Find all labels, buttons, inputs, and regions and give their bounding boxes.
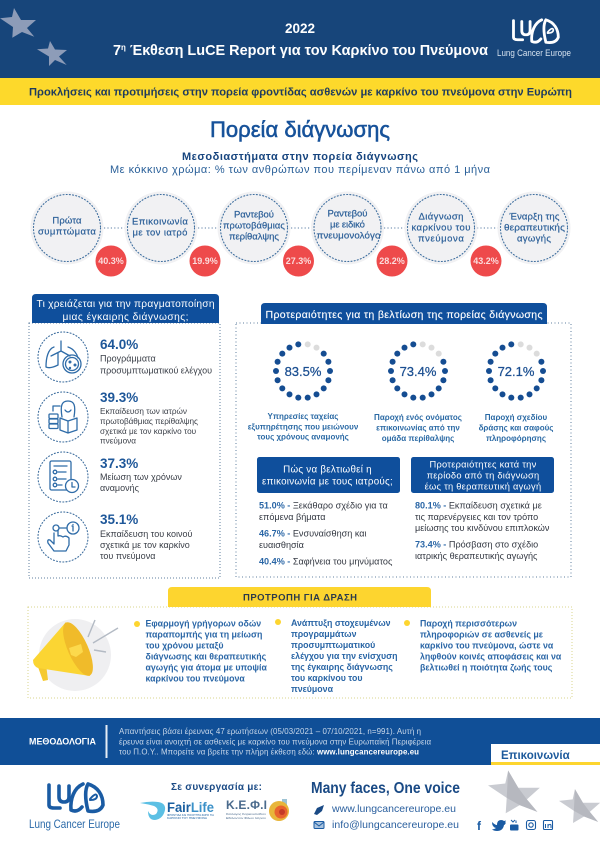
action 3: καρκίνο του πνεύμονα, ώστε να — [420, 640, 554, 650]
step 5: καρκίνου του — [412, 222, 470, 234]
FairLife logo: ΦΡΟΝΤΙΔΑ ΚΑΙ ΠΟΙΟΤΗΤΑ ΖΩΗΣ ΓΙΑ — [167, 814, 214, 817]
donut caption 2 — [374, 413, 462, 443]
action 2 — [275, 618, 398, 694]
stat 64.0: Προγράμματα — [100, 354, 156, 364]
sub heading: priorities until treatment: έως τη θεραπευτική αγωγή — [425, 482, 541, 492]
subheading: Μεσοδιαστήματα στην πορεία διάγνωσης — [182, 151, 418, 163]
icon: doctor reading — [38, 392, 88, 442]
action 2: προγραμμάτων — [291, 629, 357, 639]
list: communication: ευαισθησία — [259, 540, 304, 550]
methodology text: έρευνα είναι ανοιχτή σε ασθενείς με καρκίνο του πνεύμονα στην Ευρωπαϊκή Περιφέρεια — [119, 738, 431, 746]
sub heading: doctors communication: επικοινωνία με τους ιατρούς; — [262, 476, 393, 488]
sub heading: priorities until treatment: Προτεραιότητες κατά την — [430, 460, 537, 470]
stat 39.3: πρωτοβάθμιας περίθαλψης — [100, 417, 198, 426]
panel frame — [236, 323, 571, 577]
tab: communication — [491, 744, 600, 765]
KEFI logo: Σύλλογος Καρκινοπαθών — [226, 812, 267, 816]
action 3 — [404, 618, 562, 672]
stat 64.0: 64.0% — [100, 337, 138, 352]
action 3: πληροφοριών σε ασθενείς με — [420, 630, 544, 640]
FairLife logo: ΚΑΡΚΙΝΟ ΤΟΥ ΠΝΕΥΜΟΝΑ — [167, 817, 207, 820]
action 1 — [134, 618, 267, 684]
donut caption 2: Παροχή ενός ονόματος — [374, 413, 462, 422]
step 2 — [124, 192, 198, 264]
slogan: Many faces, One voice — [311, 780, 460, 797]
methodology text — [119, 727, 431, 756]
list: treatment priorities — [415, 500, 550, 561]
icon: facebook: f — [477, 819, 482, 833]
list: communication — [259, 500, 393, 566]
KEFI logo: Εθελοντών Φίλων Ιατρών — [226, 816, 267, 820]
step 2: με τον ιατρό — [132, 228, 188, 238]
action 1: αγωγής για άτομα με υποψία — [146, 662, 267, 672]
donut caption 1: Υπηρεσίες ταχείας — [268, 412, 338, 421]
list: treatment priorities: 80.1% - Εκπαίδευση σχετικά με — [415, 500, 542, 510]
action 2: πνεύμονα — [291, 684, 334, 694]
donut caption 3: πληροφόρησης — [486, 434, 546, 443]
step 5: Διάγνωση — [418, 212, 464, 222]
step 6 — [498, 192, 570, 264]
methodology band — [0, 718, 600, 765]
badge 19.9: 19.9% — [192, 256, 218, 266]
step 4: πνευμονολόγο — [316, 230, 380, 242]
KEFI logo: Κ.Ε.Φ.Ι — [226, 798, 267, 812]
donut caption 2: επικοινωνίας από την — [376, 424, 460, 432]
donut caption 1: εξυπηρέτησης που μειώνουν — [248, 422, 359, 432]
timeline connectors — [104, 227, 498, 229]
list: treatment priorities: 73.4% - Πρόσβαση στο σχέδιο — [415, 540, 538, 550]
footer star small — [559, 789, 600, 823]
donut caption 3: δράσης και σαφούς — [479, 424, 553, 432]
action 2: του καρκίνου του — [291, 673, 362, 683]
panel heading — [261, 303, 547, 324]
list: communication: 40.4% - Σαφήνεια του μηνύματος — [259, 556, 393, 566]
stat 35.1: σχετικά με τον καρκίνο — [100, 540, 190, 550]
step 6: Έναρξη της — [508, 212, 560, 222]
step 5 — [404, 192, 478, 264]
action 1: του χρόνου μεταξύ — [146, 640, 224, 650]
legend line: Με κόκκινο χρώμα: % των ανθρώπων που περίμεναν πάνω από 1 μήνα — [110, 164, 491, 176]
stat 64.0: προσυμπτωματικού ελέγχου — [100, 366, 212, 376]
stat 37.3: αναμονής — [100, 483, 140, 493]
year: 2022 — [285, 21, 315, 36]
timeline steps — [30, 192, 570, 264]
stat 37.3 — [100, 456, 182, 493]
stat 39.3 — [100, 390, 198, 446]
main heading: Πορεία διάγνωσης — [210, 117, 390, 142]
stat 64.0 — [100, 337, 212, 376]
footer logo: Lung Cancer Europe — [29, 817, 120, 831]
report title: Έκθεση LuCE Report για τον Καρκίνο του Πνεύμονα — [126, 43, 488, 59]
donut 83.5: 83.5% — [285, 364, 322, 379]
panel heading: ΠΡΟΤΡΟΠΗ ΓΙΑ ΔΡΑΣΗ — [243, 592, 357, 604]
KEFI logo — [226, 798, 289, 821]
panel heading: μιας έγκαιρης διάγνωσης; — [62, 311, 188, 323]
list: communication: 51.0% - Ξεκάθαρο σχέδιο για τα — [259, 500, 388, 510]
stat 35.1 — [100, 512, 193, 561]
icon: youtube — [510, 820, 518, 830]
donut 73.4: 73.4% — [400, 364, 437, 379]
panel: timely diagnosis needs — [29, 294, 220, 578]
panel frame — [29, 323, 220, 578]
stat 39.3: Εκπαίδευση των ιατρών — [100, 407, 187, 416]
badge 43.2: 43.2% — [473, 256, 499, 266]
FairLife logo: FairLife — [167, 799, 214, 815]
action 1: καρκίνου του πνεύμονα — [146, 674, 245, 684]
methodology label: ΜΕΘΟΔΟΛΟΓΙΑ — [29, 736, 96, 746]
action 3: Παροχή περισσότερων — [420, 618, 517, 628]
icon: megaphone — [33, 618, 118, 691]
action 3: βελτιωθεί η ποιότητα ζωής τους — [420, 662, 553, 672]
list: treatment priorities: μείωσης του κινδύνου επιπλοκών — [415, 523, 550, 533]
sub heading: doctors communication — [257, 457, 400, 493]
donut caption 3 — [479, 413, 553, 443]
header band — [0, 0, 600, 78]
stat 39.3: πνεύμονα — [100, 436, 136, 446]
LuCE logo white — [513, 20, 558, 43]
badge 27.3 — [283, 246, 314, 276]
step 1: Πρώτα — [52, 216, 82, 226]
red percentage badges — [96, 246, 502, 276]
stat 39.3: σχετικά με τον καρκίνο του — [100, 427, 197, 436]
icon: linkedin — [544, 820, 552, 830]
stat 35.1: Εκπαίδευση του κοινού — [100, 529, 193, 539]
sub heading: doctors communication: Πώς να βελτιωθεί η — [283, 464, 372, 476]
FairLife logo — [140, 799, 214, 820]
panel heading: Τι χρειάζεται για την πραγματοποίηση — [36, 298, 214, 310]
icon: checklist and clock — [38, 452, 88, 502]
sub heading: priorities until treatment — [411, 457, 554, 493]
list: communication: επόμενα βήματα — [259, 512, 326, 522]
report title: η — [121, 43, 126, 52]
yellow subtitle band: Προκλήσεις και προτιμήσεις στην πορεία φροντίδας ασθενών με καρκίνο του πνεύμονα στην Ευρώπη — [29, 86, 572, 98]
donut 72.1 — [486, 341, 546, 401]
badge 28.2: 28.2% — [379, 256, 405, 266]
yellow subtitle band — [0, 78, 600, 105]
donut caption 3: Παροχή σχεδίου — [485, 413, 548, 422]
stat 35.1: 35.1% — [100, 512, 138, 527]
footer logo — [29, 784, 120, 831]
methodology text: Απαντήσεις βάσει έρευνας 47 ερωτήσεων (05/03/2021 – 07/10/2021, n=991). Αυτή η — [119, 727, 421, 736]
panel: call to action — [28, 587, 572, 698]
panel heading — [32, 294, 219, 323]
step 4: Ραντεβού — [328, 208, 368, 220]
report title: 7 — [113, 43, 121, 59]
step 3: περίθαλψης — [229, 232, 279, 242]
website: www.lungcancereurope.eu — [331, 803, 456, 815]
panel heading: Προτεραιότητες για τη βελτίωση της πορείας διάγνωσης — [266, 309, 542, 321]
icon: hand and info — [38, 512, 88, 562]
action 1: διάγνωσης και θεραπευτικής — [146, 652, 267, 662]
donut caption 1: τους χρόνους αναμονής — [257, 432, 349, 442]
action 1: Εφαρμογή γρήγορων οδών — [146, 618, 261, 628]
donut 73.4 — [388, 341, 448, 401]
badge 19.9 — [190, 246, 220, 276]
sub heading: priorities until treatment: περίοδο από τη διάγνωση — [427, 470, 539, 480]
action 2: Ανάπτυξη στοχευμένων — [291, 618, 391, 628]
step 5: πνεύμονα — [418, 234, 464, 244]
panel: priorities — [236, 303, 571, 577]
icon: lungs with magnifier — [38, 332, 88, 382]
stat 39.3: 39.3% — [100, 390, 138, 405]
step 1: συμπτώματα — [38, 226, 96, 238]
step 4 — [311, 192, 384, 264]
email: info@lungcancereurope.eu — [332, 819, 459, 831]
methodology text: του Π.Ο.Υ.. Μπορείτε να βρείτε την πλήρη έκθεση εδώ: www.lungcancereurope.eu — [119, 748, 419, 756]
action 2: της έγκαιρης διάγνωσης — [291, 662, 393, 672]
badge 28.2 — [376, 246, 408, 276]
action 1: παραπομπής για τη μείωση — [146, 630, 262, 640]
step 6: αγωγής — [517, 234, 551, 244]
list: communication: 46.7% - Ενσυναίσθηση και — [259, 528, 367, 538]
tab: communication: Επικοινωνία — [501, 750, 570, 762]
step 3: πρωτοβάθμιας — [223, 220, 285, 232]
list: treatment priorities: τις παρενέργειες και τον τρόπο — [415, 512, 538, 522]
step 1 — [30, 192, 104, 264]
icon: instagram — [526, 820, 536, 830]
stat 35.1: του πνεύμονα — [100, 551, 155, 561]
icon: twitter — [492, 820, 506, 831]
action 3: ληφθούν κοινές αποφάσεις και να — [420, 652, 562, 662]
panel frame — [28, 607, 572, 698]
decorative star small — [37, 41, 67, 66]
panel heading — [168, 587, 431, 607]
partners heading: Σε συνεργασία με: — [171, 782, 262, 793]
donut caption 1 — [248, 412, 359, 442]
logo caption: Lung Cancer Europe — [497, 48, 571, 59]
step 4: με ειδικό — [330, 220, 365, 230]
step 6: θεραπευτικής — [504, 222, 565, 234]
action 2: ελέγχου για την ενίσχυση — [291, 651, 398, 661]
footer star large — [488, 771, 540, 813]
badge 40.3: 40.3% — [98, 256, 124, 266]
decorative star large — [0, 8, 36, 38]
badge 43.2 — [470, 246, 502, 276]
donut 83.5 — [273, 341, 333, 401]
step 2: Επικοινωνία — [132, 216, 188, 228]
stat 37.3: Μείωση των χρόνων — [100, 472, 182, 482]
list: treatment priorities: ιατρικής θεραπευτικής αγωγής — [415, 551, 538, 561]
badge 40.3 — [96, 246, 126, 276]
action 2: προσυμπτωματικού — [291, 640, 375, 650]
stat 37.3: 37.3% — [100, 456, 138, 471]
donut caption 2: ομάδα περίθαλψης — [382, 434, 454, 443]
badge 27.3: 27.3% — [286, 256, 311, 266]
donut 72.1: 72.1% — [498, 364, 535, 379]
step 3 — [218, 192, 290, 264]
step 3: Ραντεβού — [234, 210, 274, 220]
social icons — [477, 819, 552, 833]
